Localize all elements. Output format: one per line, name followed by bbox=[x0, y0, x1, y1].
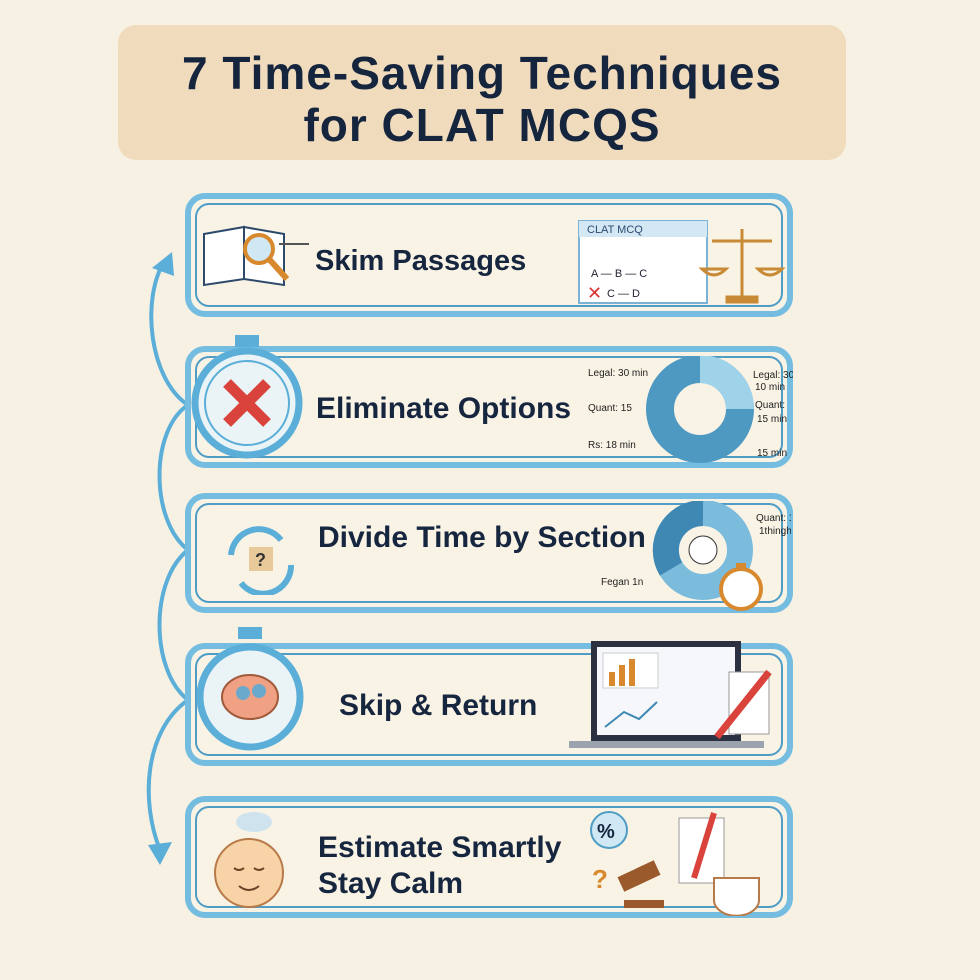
donut chart: 15 min bbox=[757, 448, 787, 459]
icon: MCQ card and scales: A — B — C bbox=[591, 268, 647, 280]
panel: eliminate options bbox=[185, 346, 793, 468]
heading: Estimate Smartly bbox=[318, 831, 561, 864]
donut chart: 10 min bbox=[755, 382, 785, 393]
donut chart: Rs: 18 min bbox=[588, 440, 636, 451]
panel: estimate smartly stay calm bbox=[185, 796, 793, 918]
icon: calm face bbox=[214, 812, 284, 908]
heading: Skim Passages bbox=[315, 245, 526, 277]
panel: divide time bbox=[185, 493, 793, 613]
heading: Stay Calm bbox=[318, 867, 463, 900]
panel: skip & return bbox=[185, 643, 793, 766]
title banner: for CLAT MCQS bbox=[303, 99, 661, 151]
heading bbox=[318, 831, 562, 900]
icon: MCQ card and scales bbox=[578, 220, 786, 304]
title banner bbox=[118, 25, 846, 160]
icon: book with magnifier bbox=[203, 226, 309, 286]
icon: MCQ card and scales: ✕ bbox=[587, 283, 602, 303]
donut chart: Legal: 30 bbox=[753, 370, 793, 381]
donut chart with stopwatch: Fegan 1n bbox=[601, 577, 643, 588]
icon: stopwatch with X bbox=[192, 335, 302, 458]
icons: percent, gavel, coffee bbox=[590, 811, 760, 916]
heading: Divide Time by Section bbox=[318, 521, 646, 554]
heading: Eliminate Options bbox=[316, 392, 571, 425]
donut chart: Quant: 15 bbox=[588, 403, 632, 414]
panel: skim passages bbox=[185, 193, 793, 317]
icon: laptop with charts bbox=[569, 641, 772, 748]
icons: percent, gavel, coffee: % bbox=[597, 821, 615, 843]
donut chart: Quant: bbox=[755, 400, 785, 411]
donut chart with stopwatch bbox=[601, 501, 791, 611]
title banner: 7 Time-Saving Techniques bbox=[182, 47, 782, 99]
icons: percent, gavel, coffee: ? bbox=[592, 864, 608, 894]
donut chart: 15 min bbox=[757, 414, 787, 425]
icon: cycle arrows with question: ? bbox=[255, 550, 266, 570]
icon: MCQ card and scales: C — D bbox=[607, 288, 640, 300]
donut chart: Legal: 30 min bbox=[588, 368, 648, 379]
icon: stopwatch with brain bbox=[196, 627, 304, 750]
icon: cycle arrows with question bbox=[228, 526, 294, 595]
heading: Skip & Return bbox=[339, 689, 537, 722]
donut chart bbox=[588, 356, 793, 463]
icon: MCQ card and scales: CLAT MCQ bbox=[587, 224, 643, 236]
